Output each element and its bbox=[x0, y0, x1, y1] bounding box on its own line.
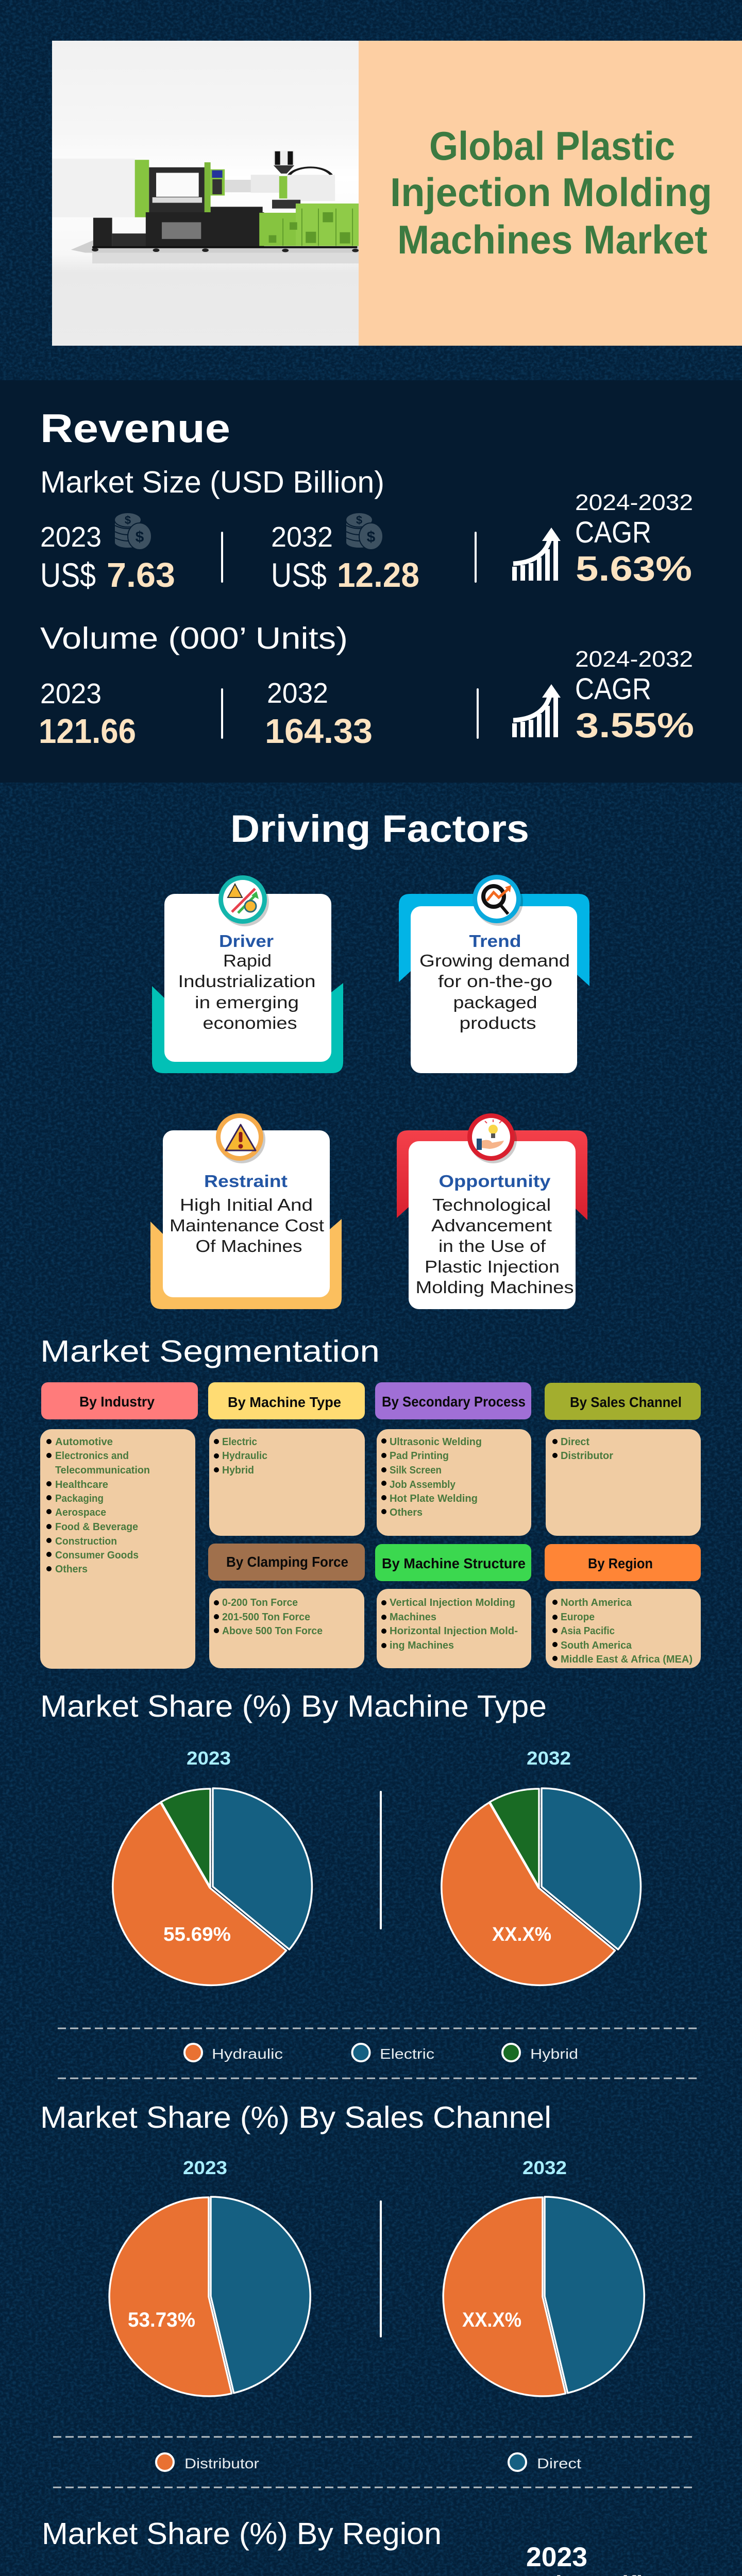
title: Global Plastic bbox=[429, 123, 675, 168]
panel: by region: Asia Pacific bbox=[561, 1625, 615, 1637]
stat: 2023 volume bbox=[39, 677, 136, 751]
panel: by secondary process: Pad Printing bbox=[390, 1450, 449, 1462]
panel: by secondary process: By Secondary Process bbox=[382, 1394, 526, 1410]
heading: Revenue: Revenue bbox=[40, 405, 230, 451]
pie chart: sales channel 2023: 53.73% bbox=[128, 2309, 195, 2331]
panel: by industry: Consumer Goods bbox=[55, 1550, 139, 1561]
panel: by machine structure: By Machine Structure bbox=[382, 1555, 526, 1571]
pie chart: sales channel 2032: XX.X% bbox=[462, 2309, 521, 2331]
panel: by machine structure: Machines bbox=[390, 1612, 436, 1623]
panel: driver: Rapid bbox=[223, 951, 272, 970]
panel: restraint: Of Machines bbox=[196, 1236, 302, 1256]
panel: by clamping force bbox=[208, 1544, 365, 1668]
label: 2032: 2032 bbox=[527, 1748, 571, 1769]
title: Injection Molding bbox=[390, 170, 712, 215]
icon: coins 2023 bbox=[114, 513, 151, 550]
panel: by secondary process: Silk Screen bbox=[390, 1465, 442, 1476]
legend: sales channel bbox=[53, 2437, 696, 2487]
stat: CAGR value: 2024-2032 bbox=[575, 490, 693, 515]
panel: by secondary process bbox=[375, 1382, 531, 1536]
panel: opportunity: Opportunity bbox=[439, 1172, 551, 1191]
divider bbox=[380, 1791, 382, 1929]
heading: Market Share by Sales Channel: Market Share (%) By Sales Channel bbox=[40, 2100, 551, 2134]
icon: growth chart arrow bbox=[512, 528, 561, 581]
legend: machine type: Electric bbox=[380, 2046, 434, 2062]
panel: by industry: Electronics and bbox=[55, 1450, 129, 1462]
title panel bbox=[359, 41, 742, 346]
stat: CAGR value: 5.63% bbox=[576, 549, 692, 588]
panel: by clamping force: 201-500 Ton Force bbox=[222, 1612, 310, 1623]
stat: 2032 market size bbox=[271, 521, 419, 595]
panel: by region: Middle East & Africa (MEA) bbox=[561, 1654, 693, 1665]
stat: CAGR volume: 2024-2032 bbox=[575, 647, 693, 672]
icon: opportunity badge bbox=[467, 1113, 517, 1163]
stat: CAGR value: CAGR bbox=[575, 516, 651, 549]
icon: coins 2023: $ bbox=[125, 514, 131, 527]
panel: trend: Growing demand bbox=[419, 951, 570, 970]
panel: by machine structure bbox=[375, 1544, 531, 1668]
panel: opportunity: in the Use of bbox=[439, 1236, 546, 1256]
stat: CAGR volume: 3.55% bbox=[576, 706, 694, 745]
panel: opportunity: Technological bbox=[432, 1195, 551, 1214]
panel: restraint bbox=[150, 1113, 342, 1309]
heading: Market Share by Region: Market Share (%) By Region bbox=[42, 2517, 442, 2551]
panel: by machine type: Electric bbox=[222, 1436, 257, 1448]
machine image panel bbox=[52, 41, 360, 346]
pie chart: machine type 2032: XX.X% bbox=[492, 1924, 551, 1945]
pie chart: machine type 2032 bbox=[442, 1788, 640, 1985]
panel: by machine type: Hydraulic bbox=[222, 1450, 267, 1462]
panel: by machine type: By Machine Type bbox=[228, 1394, 341, 1410]
label: 2032: 2032 bbox=[522, 2157, 567, 2178]
title: Machines Market bbox=[397, 217, 707, 262]
panel: by industry: Aerospace bbox=[55, 1507, 106, 1518]
panel: by sales channel bbox=[545, 1383, 701, 1536]
panel: by machine structure: Horizontal Injection Mold- bbox=[390, 1625, 518, 1637]
stat: 2023 market size: 7.63 bbox=[107, 556, 175, 595]
stat: 2032 volume bbox=[265, 677, 373, 751]
stat: 2032 market size: 2032 bbox=[271, 521, 333, 553]
stat: 2032 market size: US$ bbox=[271, 556, 327, 594]
legend: sales channel: Direct bbox=[537, 2455, 581, 2471]
panel: by industry: Food & Beverage bbox=[55, 1521, 138, 1533]
pie chart: machine type 2023: 55.69% bbox=[163, 1924, 231, 1945]
icon: coins 2023: $ bbox=[136, 529, 144, 546]
legend: machine type: Hydraulic bbox=[212, 2046, 283, 2062]
panel: by machine type bbox=[208, 1382, 365, 1536]
panel: by region: By Region bbox=[588, 1555, 653, 1571]
panel: restraint: Maintenance Cost bbox=[170, 1216, 324, 1235]
stat: 2032 volume: 164.33 bbox=[265, 712, 373, 751]
panel: trend: packaged bbox=[453, 993, 537, 1012]
stat: 2032 market size: 12.28 bbox=[337, 556, 419, 595]
callout: Asia Pacific share bbox=[525, 2542, 656, 2576]
panel: by sales channel: By Sales Channel bbox=[570, 1394, 682, 1410]
legend: machine type bbox=[58, 2028, 700, 2078]
panel: driver: Industrialization bbox=[178, 972, 315, 991]
panel: by industry: Telecommunication bbox=[55, 1465, 150, 1476]
callout: Asia Pacific share: 2023 bbox=[526, 2542, 587, 2572]
heading: Driving Factors: Driving Factors bbox=[230, 807, 529, 850]
panel: opportunity: Molding Machines bbox=[415, 1278, 574, 1297]
pie chart: sales channel 2032 bbox=[443, 2197, 644, 2396]
stat: CAGR value bbox=[575, 490, 693, 588]
icon: coins 2032: $ bbox=[356, 514, 362, 527]
panel: by secondary process: Others bbox=[390, 1507, 423, 1518]
panel: restraint: High Initial And bbox=[180, 1195, 313, 1214]
divider bbox=[477, 688, 479, 739]
icon: growth chart arrow bbox=[512, 684, 561, 737]
stat: 2023 market size bbox=[40, 521, 175, 595]
stat: 2032 volume: 2032 bbox=[267, 677, 328, 709]
panel: by clamping force: Above 500 Ton Force bbox=[222, 1625, 323, 1637]
panel: by industry bbox=[40, 1382, 198, 1669]
panel: driver: in emerging bbox=[195, 993, 299, 1012]
heading: Volume: Volume (000’ Units) bbox=[40, 621, 348, 655]
panel: by secondary process: Job Assembly bbox=[390, 1479, 456, 1490]
pie chart: machine type 2023 bbox=[113, 1788, 312, 1985]
stat: CAGR volume bbox=[575, 647, 694, 745]
pie chart: sales channel 2023 bbox=[109, 2197, 310, 2396]
panel: by industry: Automotive bbox=[55, 1436, 113, 1448]
panel: by industry: Healthcare bbox=[55, 1479, 108, 1490]
stat: 2023 volume: 2023 bbox=[40, 677, 102, 709]
panel: trend: products bbox=[460, 1013, 536, 1032]
panel: opportunity: Advancement bbox=[431, 1216, 552, 1235]
panel: opportunity bbox=[397, 1113, 587, 1309]
icon: trend badge bbox=[473, 875, 523, 926]
heading: Market Share by Machine Type: Market Share (%) By Machine Type bbox=[40, 1689, 547, 1723]
panel: by region: Europe bbox=[561, 1612, 595, 1623]
stat: 2023 market size: US$ bbox=[40, 556, 96, 594]
panel: by industry: Packaging bbox=[55, 1493, 104, 1504]
panel: by clamping force: 0-200 Ton Force bbox=[222, 1597, 298, 1608]
panel: driver: Driver bbox=[219, 931, 274, 951]
panel: by secondary process: Hot Plate Welding bbox=[390, 1493, 478, 1504]
panel: by region: South America bbox=[561, 1640, 632, 1651]
heading: Market Segmentation: Market Segmentation bbox=[40, 1334, 380, 1368]
panel: by industry: Others bbox=[55, 1564, 88, 1575]
icon: coins 2032: $ bbox=[367, 529, 376, 546]
panel: by machine structure: Vertical Injection Molding bbox=[390, 1597, 515, 1608]
panel: trend bbox=[399, 875, 589, 1073]
stat: 2023 volume: 121.66 bbox=[39, 712, 136, 751]
legend: sales channel: Distributor bbox=[184, 2455, 259, 2471]
panel: trend: for on-the-go bbox=[438, 972, 552, 991]
icon: warning badge bbox=[216, 1113, 265, 1163]
panel: by sales channel: Distributor bbox=[561, 1450, 613, 1462]
heading: Market Size: Market Size (USD Billion) bbox=[40, 465, 384, 499]
panel: by machine structure: ing Machines bbox=[390, 1640, 454, 1651]
panel: by clamping force: By Clamping Force bbox=[226, 1554, 348, 1570]
divider bbox=[221, 532, 223, 583]
revenue band bbox=[0, 380, 742, 783]
legend: machine type: Hybrid bbox=[530, 2046, 578, 2062]
label: 2023: 2023 bbox=[183, 2157, 227, 2178]
divider bbox=[380, 2200, 382, 2337]
divider bbox=[221, 688, 223, 739]
panel: opportunity: Plastic Injection bbox=[425, 1257, 560, 1276]
icon: coins 2032 bbox=[346, 513, 383, 550]
icon: injection molding machine bbox=[52, 150, 360, 263]
panel: by region: North America bbox=[561, 1597, 632, 1608]
panel: by machine type: Hybrid bbox=[222, 1465, 254, 1476]
stat: 2023 market size: 2023 bbox=[40, 521, 102, 553]
stat: CAGR volume: CAGR bbox=[575, 672, 651, 706]
panel: by secondary process: Ultrasonic Welding bbox=[390, 1436, 482, 1448]
panel: restraint: Restraint bbox=[204, 1172, 288, 1191]
title bbox=[390, 123, 712, 262]
header panel bbox=[52, 41, 742, 346]
panel: by sales channel: Direct bbox=[561, 1436, 589, 1448]
label: 2023: 2023 bbox=[187, 1748, 231, 1769]
divider bbox=[475, 532, 477, 583]
panel: by region bbox=[545, 1544, 701, 1668]
icon: driver badge bbox=[218, 875, 269, 926]
panel: by industry: Construction bbox=[55, 1536, 117, 1547]
panel: by industry: By Industry bbox=[79, 1394, 155, 1410]
panel: trend: Trend bbox=[469, 931, 521, 951]
panel: driver: economies bbox=[203, 1013, 297, 1032]
panel: driver bbox=[152, 875, 343, 1073]
